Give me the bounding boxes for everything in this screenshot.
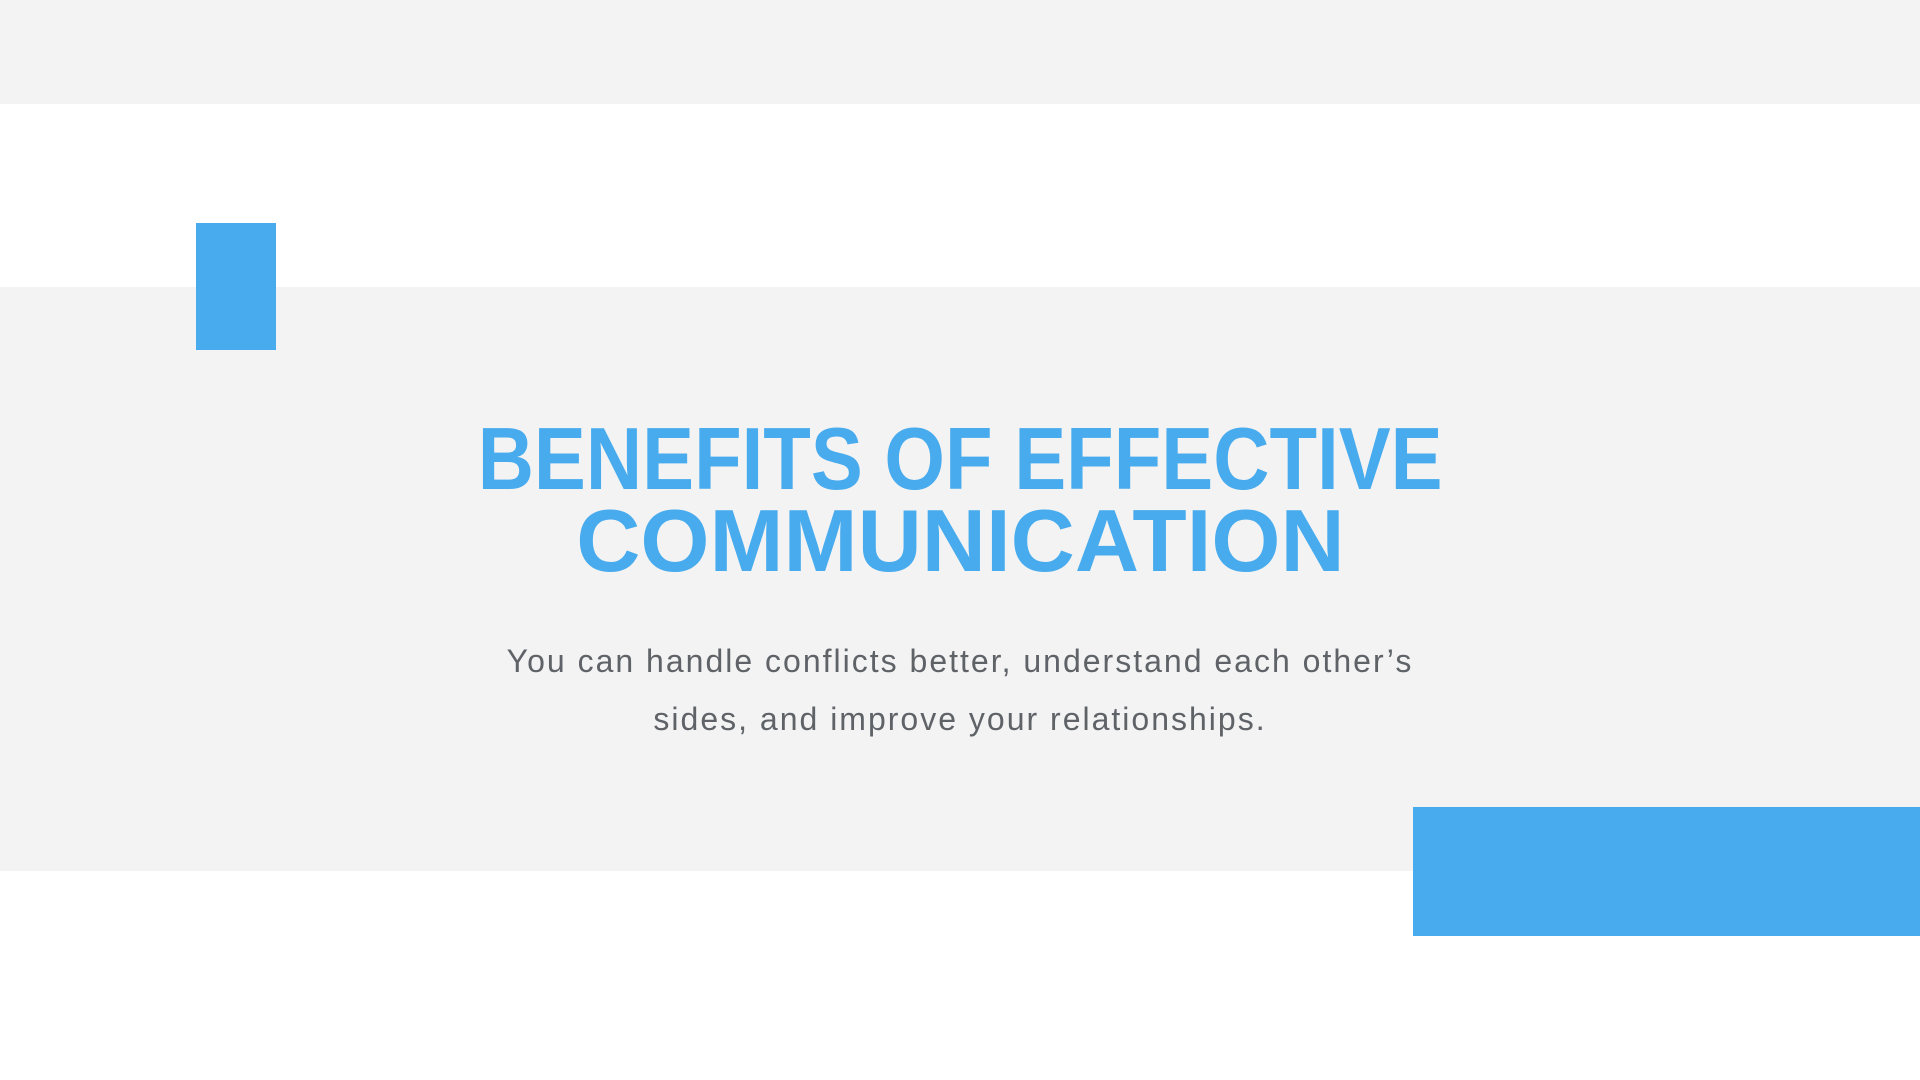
middle gray panel: [0, 287, 1920, 871]
title: BENEFITS OF EFFECTIVE: [478, 409, 1442, 508]
top gray band: [0, 0, 1920, 104]
title: [478, 409, 1442, 590]
blue accent square top-left: [196, 223, 276, 350]
blue accent bar bottom-right: [1413, 807, 1920, 936]
subtitle text: You can handle conflicts better, understand each other’s: [507, 643, 1413, 679]
subtitle text: sides, and improve your relationships.: [653, 701, 1267, 737]
title: COMMUNICATION: [576, 491, 1344, 590]
subtitle text: [507, 643, 1413, 737]
